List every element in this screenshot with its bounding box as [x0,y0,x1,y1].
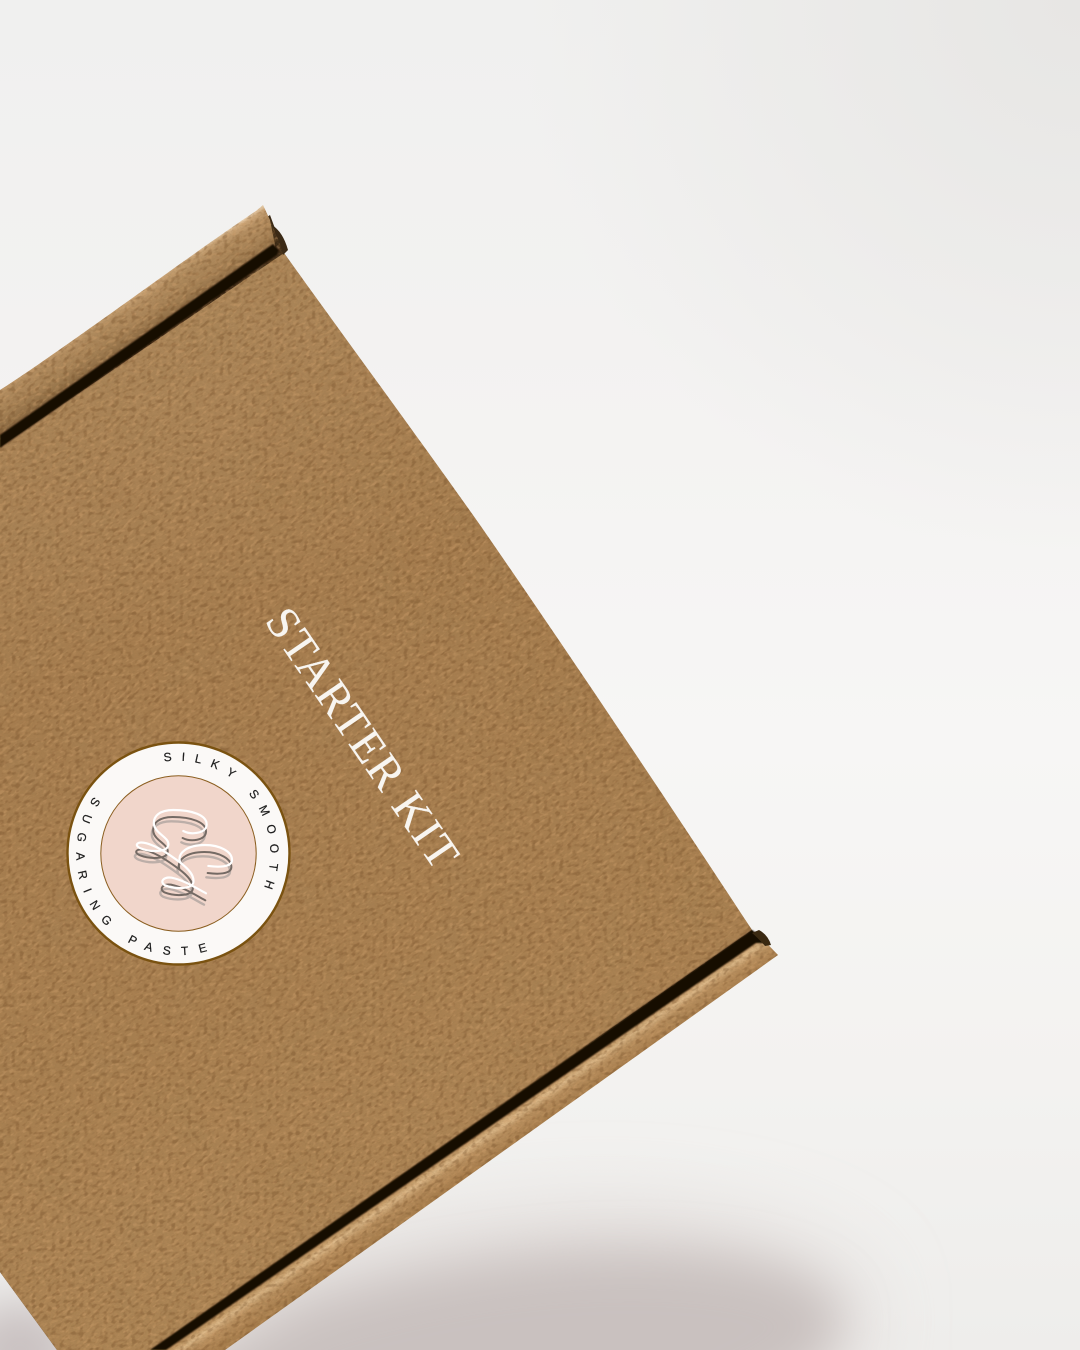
cast shadow under box [0,1120,860,1320]
title: STARTER KIT: STARTER KIT [256,598,470,877]
corner notch top [272,225,288,255]
main face [0,253,752,1350]
top slit [0,244,279,448]
top flap [0,205,276,445]
box underlay [0,215,765,1350]
paper texture [0,200,790,1350]
badge centre [101,776,256,931]
script monogram logo [135,810,232,905]
ring text: bottom: SUGARING PASTE [76,798,208,956]
round sticker badge [66,741,291,966]
bottom flap [132,932,778,1350]
badge ring [68,742,290,964]
ring text: top: SILKY SMOOTH [164,752,279,890]
kraft box [0,200,790,1350]
bottom slit [150,930,770,1350]
corner notch bottom [752,930,771,946]
